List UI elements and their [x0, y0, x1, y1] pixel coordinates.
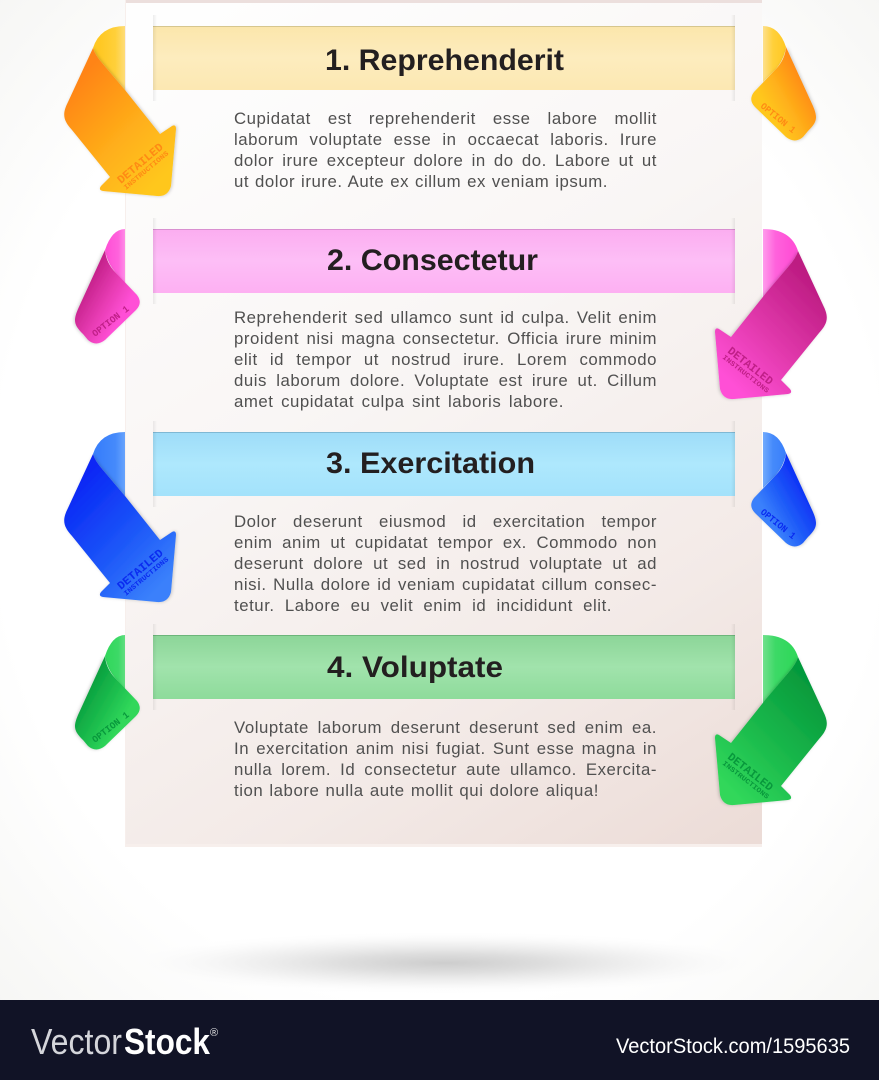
arrow: blue detailed instructions — [64, 432, 176, 602]
body text 4 — [234, 718, 657, 800]
footer logo: ® — [210, 1027, 218, 1039]
body text 4: In exercitation anim nisi fugiat. Sunt esse magna in — [234, 739, 657, 758]
footer bar — [0, 1000, 879, 1080]
arrow: blue option 1 — [751, 432, 816, 546]
arrow: green detailed instructions: INSTRUCTIONS — [720, 760, 770, 801]
body text 2: amet cupidatat culpa sint laboris labore. — [234, 392, 564, 411]
heading 1: 1. Reprehenderit — [325, 44, 564, 77]
arrow: green detailed instructions — [715, 635, 827, 805]
footer url: VectorStock.com/1595635 — [616, 1035, 850, 1058]
ribbon 4: heading band — [153, 624, 735, 710]
body text 3: enim anim ut cupidatat tempor ex. Commodo non — [234, 533, 657, 552]
arrow: pink option 1 — [75, 229, 140, 344]
paper sheet — [125, 0, 762, 847]
arrow: yellow detailed instructions: DETAILED — [115, 141, 167, 187]
body text 1: laborum voluptate esse in occaecat laboris. Irure — [234, 130, 657, 149]
footer logo: Stock — [124, 1021, 211, 1062]
ribbon 1: heading band — [153, 15, 735, 101]
arrow: pink detailed instructions: INSTRUCTIONS — [720, 354, 770, 395]
ribbon 3: heading band — [153, 421, 735, 507]
ribbon 2: heading band — [153, 218, 735, 304]
body text 3: Dolor deserunt eiusmod id exercitation tempor — [234, 512, 657, 531]
heading 3: 3. Exercitation — [326, 447, 535, 480]
body text 2: elit id tempor ut nostrud irure. Lorem commodo — [234, 350, 657, 369]
arrow: yellow detailed instructions — [64, 26, 176, 196]
body text 1 — [234, 109, 657, 191]
body text 2: Reprehenderit sed ullamco sunt id culpa. Velit enim — [234, 308, 657, 327]
body text 4: tion labore nulla aute mollit qui dolore aliqua! — [234, 781, 599, 800]
floor shadow — [105, 931, 785, 995]
body text 4: Voluptate laborum deserunt deserunt sed enim ea. — [234, 718, 657, 737]
body text 1: ut dolor irure. Aute ex cillum ex veniam ipsum. — [234, 172, 608, 191]
body text 2: duis laborum dolore. Voluptate est irure ut. Cillum — [234, 371, 657, 390]
body text 4: nulla lorem. Id consectetur aute ullamco. Exercita- — [234, 760, 657, 779]
body text 2: proident nisi magna consectetur. Officia irure minim — [234, 329, 657, 348]
arrow: green option 1: OPTION 1 — [90, 709, 132, 745]
body text 3: tetur. Labore eu velit enim id incididunt elit. — [234, 596, 612, 615]
arrow: yellow option 1 — [751, 26, 816, 140]
body text 3: deserunt dolore ut sed in nostrud voluptate ut ad — [234, 554, 657, 573]
arrow: blue detailed instructions: DETAILED — [115, 547, 167, 593]
body text 3 — [234, 512, 657, 615]
arrow: pink detailed instructions — [715, 229, 827, 399]
arrow: pink detailed instructions: DETAILED — [725, 345, 775, 388]
body text 1: Cupidatat est reprehenderit esse labore mollit — [234, 109, 657, 128]
footer logo: Vector — [31, 1021, 122, 1062]
heading 2: 2. Consectetur — [327, 244, 538, 277]
arrow: yellow detailed instructions: INSTRUCTIONS — [123, 150, 171, 192]
arrow: pink option 1: OPTION 1 — [90, 303, 132, 339]
arrow: blue option 1: OPTION 1 — [758, 507, 798, 542]
body text 1: dolor irure excepteur dolore in do do. Labore ut ut — [234, 151, 657, 170]
body text 3: nisi. Nulla dolore id veniam cupidatat cillum consec- — [234, 575, 657, 594]
body text 2 — [234, 308, 657, 411]
arrow: blue detailed instructions: INSTRUCTIONS — [123, 556, 171, 598]
heading 4: 4. Voluptate — [327, 651, 503, 684]
arrow: green detailed instructions: DETAILED — [725, 751, 775, 794]
footer logo — [31, 1021, 218, 1062]
arrow: green option 1 — [75, 635, 140, 750]
arrow: yellow option 1: OPTION 1 — [758, 101, 798, 136]
